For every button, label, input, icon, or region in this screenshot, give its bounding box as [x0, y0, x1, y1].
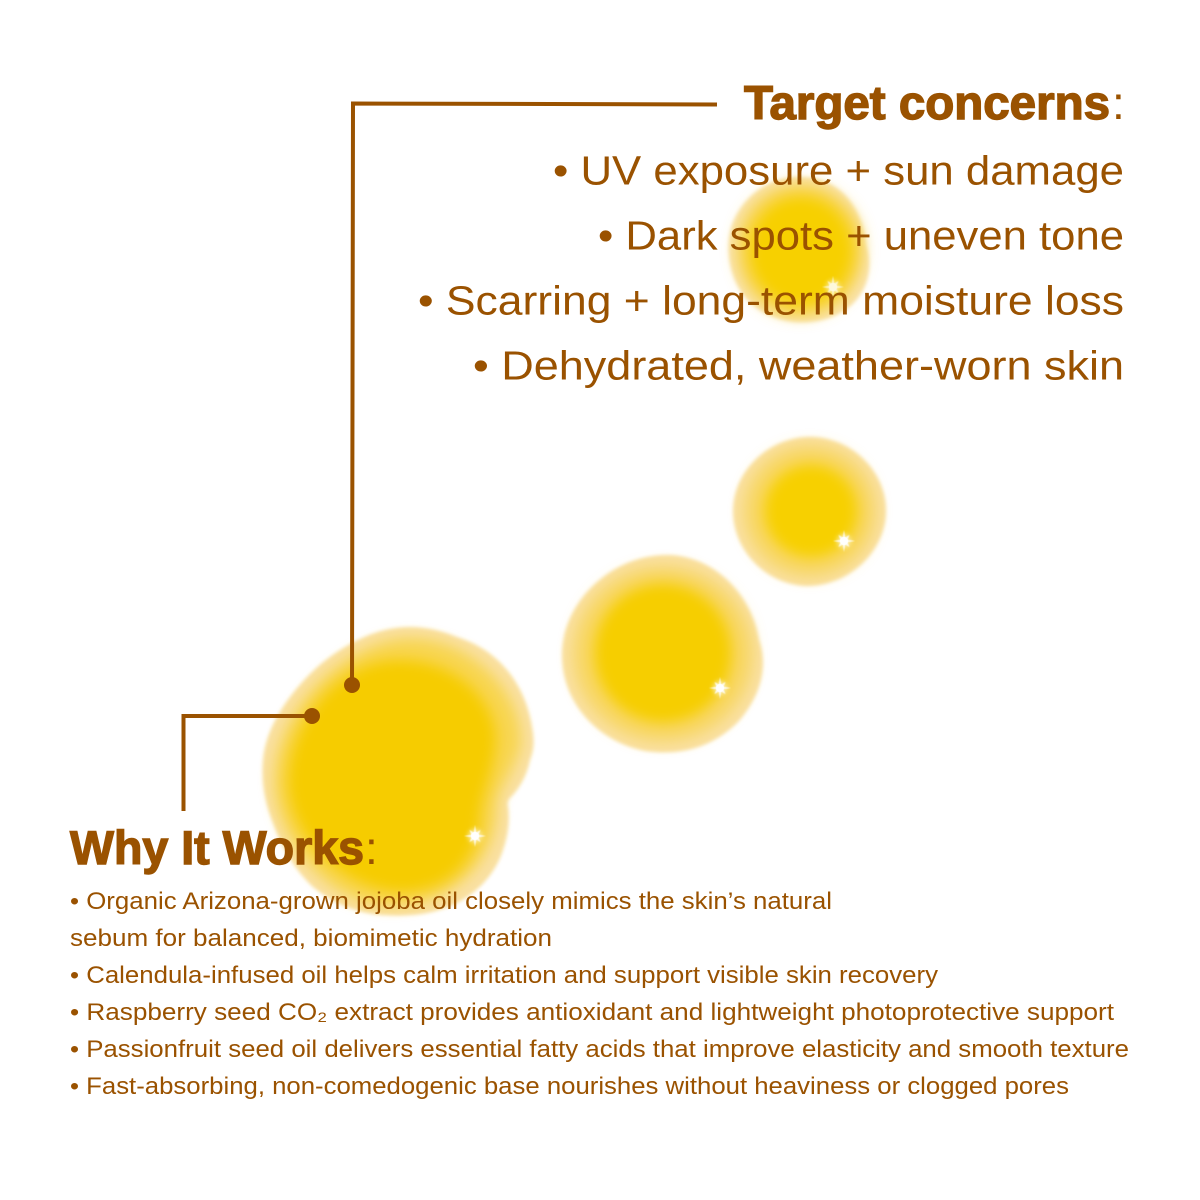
heading: why it works: : — [365, 822, 378, 874]
list: target concerns — [418, 148, 1124, 388]
oil droplet: top right behind text — [729, 177, 869, 322]
heading: why it works: Why It Works — [70, 821, 364, 874]
oil droplet: large — [262, 627, 534, 916]
oil droplet: medium — [562, 555, 763, 752]
list: why it works: • Raspberry seed CO₂ extract provides antioxidant and lightweight photoprotective support — [70, 999, 1114, 1026]
list: why it works: • Organic Arizona-grown jojoba oil closely mimics the skin’s natural — [70, 888, 832, 915]
list: why it works — [70, 888, 1129, 1100]
list: why it works: • Calendula-infused oil helps calm irritation and support visible skin recovery — [70, 962, 938, 989]
list: why it works: • Passionfruit seed oil delivers essential fatty acids that improve elasticity and smooth texture — [70, 1036, 1129, 1063]
list: target concerns: • Dark spots + uneven tone — [598, 212, 1124, 258]
list: target concerns: • UV exposure + sun damage — [553, 148, 1124, 194]
oil droplet: small — [733, 437, 886, 586]
list: target concerns: • Dehydrated, weather-worn skin — [473, 342, 1124, 388]
heading: target concerns: Target concerns — [744, 76, 1110, 129]
connector: why it works to droplet — [184, 708, 320, 811]
heading: target concerns: : — [1112, 77, 1125, 129]
list: why it works: sebum for balanced, biomimetic hydration — [70, 925, 552, 952]
list: target concerns: • Scarring + long-term moisture loss — [418, 278, 1124, 324]
connector: target concerns to droplet — [344, 104, 717, 693]
list: why it works: • Fast-absorbing, non-comedogenic base nourishes without heaviness or clogged pores — [70, 1073, 1069, 1100]
